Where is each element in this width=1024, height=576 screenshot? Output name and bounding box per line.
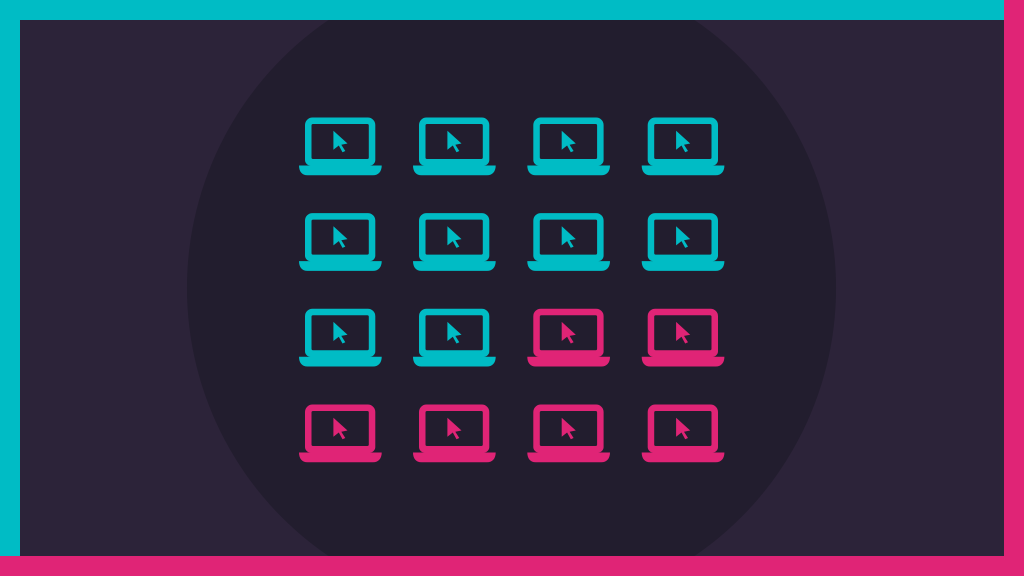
- icon: laptop row 4 col 3: [527, 404, 610, 462]
- bottom pink border: [0, 556, 1024, 576]
- central dark circle: [187, 20, 836, 556]
- icon: laptop row 3 col 2: [413, 309, 496, 366]
- icon: laptop row 4 col 2: [413, 404, 496, 462]
- icon: laptop row 3 col 3: [527, 309, 610, 366]
- icon: laptop row 2 col 4: [642, 213, 724, 271]
- icon: laptop row 4 col 1: [299, 404, 382, 462]
- icon: laptop row 1 col 1: [299, 118, 382, 175]
- icon: laptop row 1 col 4: [642, 118, 724, 175]
- icon: laptop row 3 col 1: [299, 309, 382, 366]
- icon: laptop row 2 col 3: [527, 213, 610, 271]
- icon: laptop row 2 col 2: [413, 213, 496, 271]
- icon grid: 10 teal and 6 pink laptops: [299, 118, 724, 462]
- icon: laptop row 1 col 2: [413, 118, 496, 175]
- icon: laptop row 1 col 3: [527, 118, 610, 175]
- icon: laptop row 4 col 4: [642, 404, 724, 462]
- icon: laptop row 3 col 4: [642, 309, 724, 366]
- left teal border: [0, 0, 20, 556]
- top teal border: [0, 0, 1004, 20]
- right pink border: [1004, 0, 1024, 576]
- icon: laptop row 2 col 1: [299, 213, 382, 271]
